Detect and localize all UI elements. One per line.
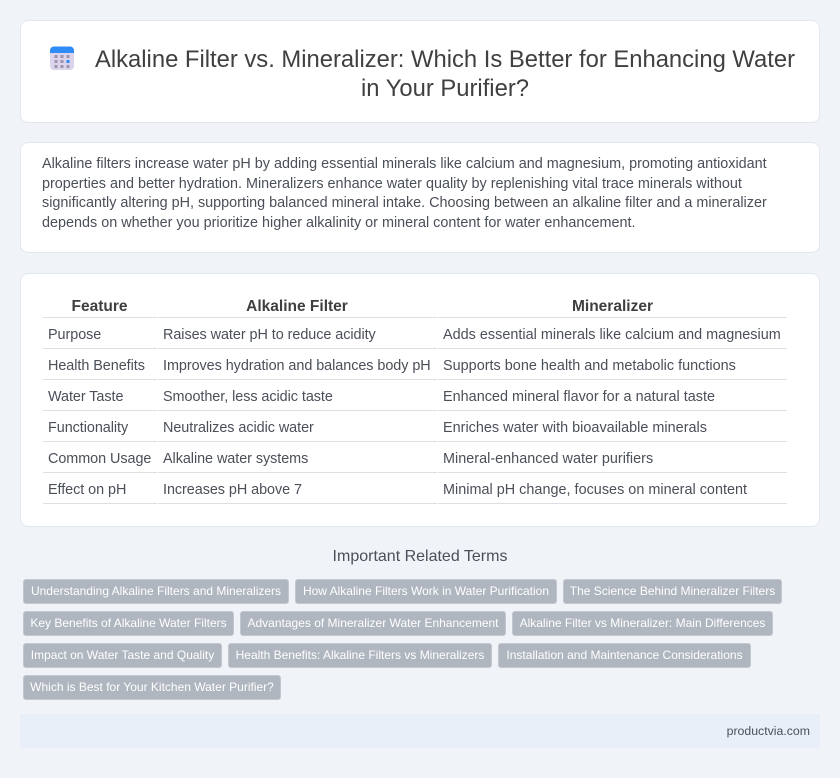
row: Water Taste: Enhanced mineral flavor for a natural taste	[443, 389, 715, 405]
tag: The Science Behind Mineralizer Filters	[570, 584, 775, 598]
row: Common Usage: Common Usage	[48, 451, 151, 467]
header panel	[20, 20, 820, 123]
title: Alkaline Filter vs. Mineralizer: Which Is Better for Enhancing Water	[95, 46, 795, 73]
footer source: productvia.com	[727, 724, 810, 738]
tag	[23, 579, 289, 604]
intro panel	[20, 142, 820, 253]
row: Common Usage: Alkaline water systems	[163, 451, 308, 467]
row: Health Benefits	[48, 358, 736, 374]
tag	[295, 579, 557, 604]
row: Effect on pH: Increases pH above 7	[163, 482, 302, 498]
row: Water Taste	[48, 389, 715, 405]
icon: calendar	[50, 46, 74, 70]
intro text: significantly altering pH, supporting balanced mineral intake. Choosing between an alkaline filter and a mineralizer	[42, 195, 767, 211]
tag: How Alkaline Filters Work in Water Purification	[303, 584, 549, 598]
row: Health Benefits: Health Benefits	[48, 358, 145, 374]
intro text: properties and better hydration. Mineralizers enhance water quality by replenishing vital trace minerals without	[42, 176, 742, 192]
row: Functionality	[48, 420, 707, 436]
footer bar	[20, 714, 820, 748]
intro text	[42, 156, 767, 230]
title: in Your Purifier?	[361, 75, 529, 102]
tag: Understanding Alkaline Filters and Mineralizers	[31, 584, 281, 598]
table header: Mineralizer: Mineralizer	[572, 298, 653, 315]
row: Purpose: Purpose	[48, 327, 101, 343]
tag	[240, 611, 506, 636]
tag	[512, 611, 773, 636]
tag: Advantages of Mineralizer Water Enhancement	[247, 616, 498, 630]
table header: Alkaline Filter: Alkaline Filter	[246, 298, 348, 315]
title	[95, 46, 795, 102]
tag: Health Benefits: Alkaline Filters vs Mineralizers	[236, 648, 484, 662]
tag: Key Benefits of Alkaline Water Filters	[30, 616, 227, 630]
row: Effect on pH: Effect on pH	[48, 482, 126, 498]
row: Purpose: Raises water pH to reduce acidity	[163, 327, 376, 343]
row: Functionality: Neutralizes acidic water	[163, 420, 314, 436]
tag	[563, 579, 782, 604]
tag: Impact on Water Taste and Quality	[31, 648, 214, 662]
row: Effect on pH	[48, 482, 747, 498]
tag: Which is Best for Your Kitchen Water Purifier?	[30, 680, 274, 694]
tag: Installation and Maintenance Considerations	[506, 648, 743, 662]
row: Functionality: Functionality	[48, 420, 128, 436]
row: Common Usage	[48, 451, 653, 467]
comparison table panel	[20, 273, 820, 527]
row: Purpose	[48, 327, 781, 343]
intro text: depends on whether you prioritize higher alkalinity or mineral content for water enhancement.	[42, 214, 636, 230]
tag	[23, 611, 234, 636]
row: Water Taste: Smoother, less acidic taste	[163, 389, 333, 405]
row: Water Taste: Water Taste	[48, 389, 123, 405]
row: Effect on pH: Minimal pH change, focuses on mineral content	[443, 482, 747, 498]
row: Purpose: Adds essential minerals like calcium and magnesium	[443, 327, 781, 343]
related term tags	[23, 579, 782, 700]
row: Health Benefits: Supports bone health and metabolic functions	[443, 358, 736, 374]
row: Health Benefits: Improves hydration and balances body pH	[163, 358, 431, 374]
tag	[498, 643, 751, 668]
row: Common Usage: Mineral-enhanced water purifiers	[443, 451, 653, 467]
tag	[228, 643, 492, 668]
row: Functionality: Enriches water with bioavailable minerals	[443, 420, 707, 436]
intro text: Alkaline filters increase water pH by adding essential minerals like calcium and magnesium, promoting antioxidant	[42, 156, 767, 172]
tag	[23, 643, 222, 668]
table header: Feature: Feature	[72, 298, 128, 315]
related terms heading: Important Related Terms	[333, 548, 507, 565]
tag	[23, 675, 281, 700]
tag: Alkaline Filter vs Mineralizer: Main Differences	[520, 616, 765, 630]
